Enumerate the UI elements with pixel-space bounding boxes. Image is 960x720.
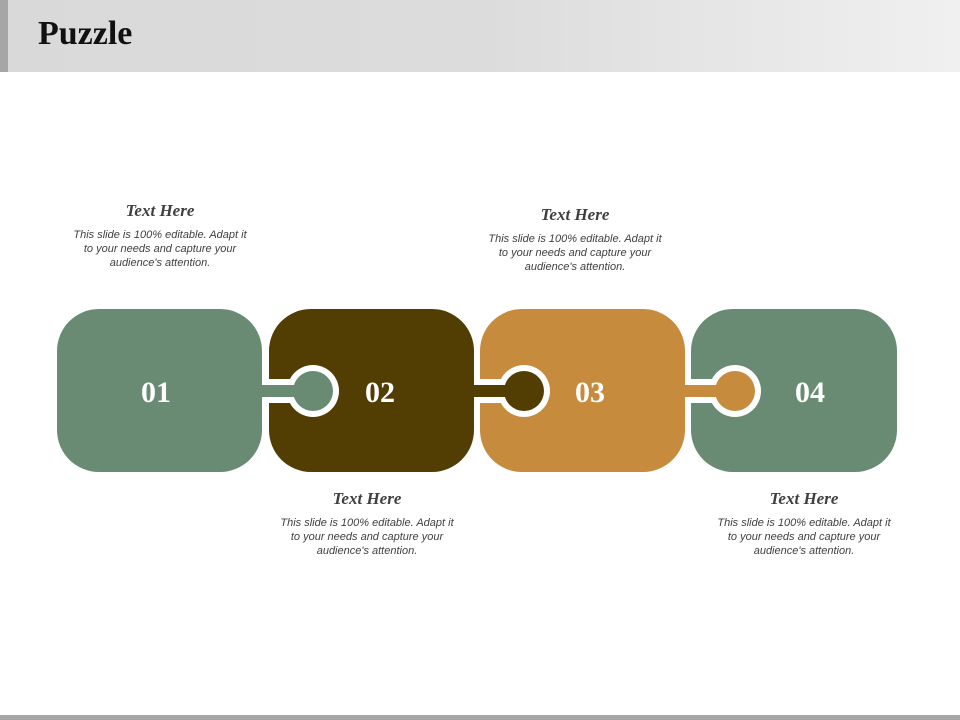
piece 03: 03 [575, 376, 605, 409]
text block 2 [280, 489, 454, 557]
text block 1: Text Here [126, 201, 194, 220]
text block 4: Text Here [770, 489, 838, 508]
title: Puzzle [38, 15, 132, 52]
text block 4 [717, 489, 891, 557]
text block 3 [488, 205, 662, 273]
piece 01: 01 [141, 376, 171, 409]
text block 3: This slide is 100% editable. Adapt it to your needs and capture your audience's attention. [488, 233, 662, 273]
text block 3: Text Here [541, 205, 609, 224]
piece 02 [258, 309, 474, 472]
text block 1: This slide is 100% editable. Adapt it to your needs and capture your audience's attention. [73, 229, 247, 269]
text block 2: Text Here [333, 489, 401, 508]
piece 02: 02 [365, 376, 395, 409]
header band [0, 0, 960, 72]
piece 04: 04 [795, 376, 825, 409]
text block 1 [73, 201, 247, 269]
text block 4: This slide is 100% editable. Adapt it to your needs and capture your audience's attention. [717, 517, 891, 557]
text block 2: This slide is 100% editable. Adapt it to your needs and capture your audience's attention. [280, 517, 454, 557]
piece 04 [681, 309, 897, 472]
piece 03 [470, 309, 685, 472]
piece 01 [57, 309, 262, 472]
